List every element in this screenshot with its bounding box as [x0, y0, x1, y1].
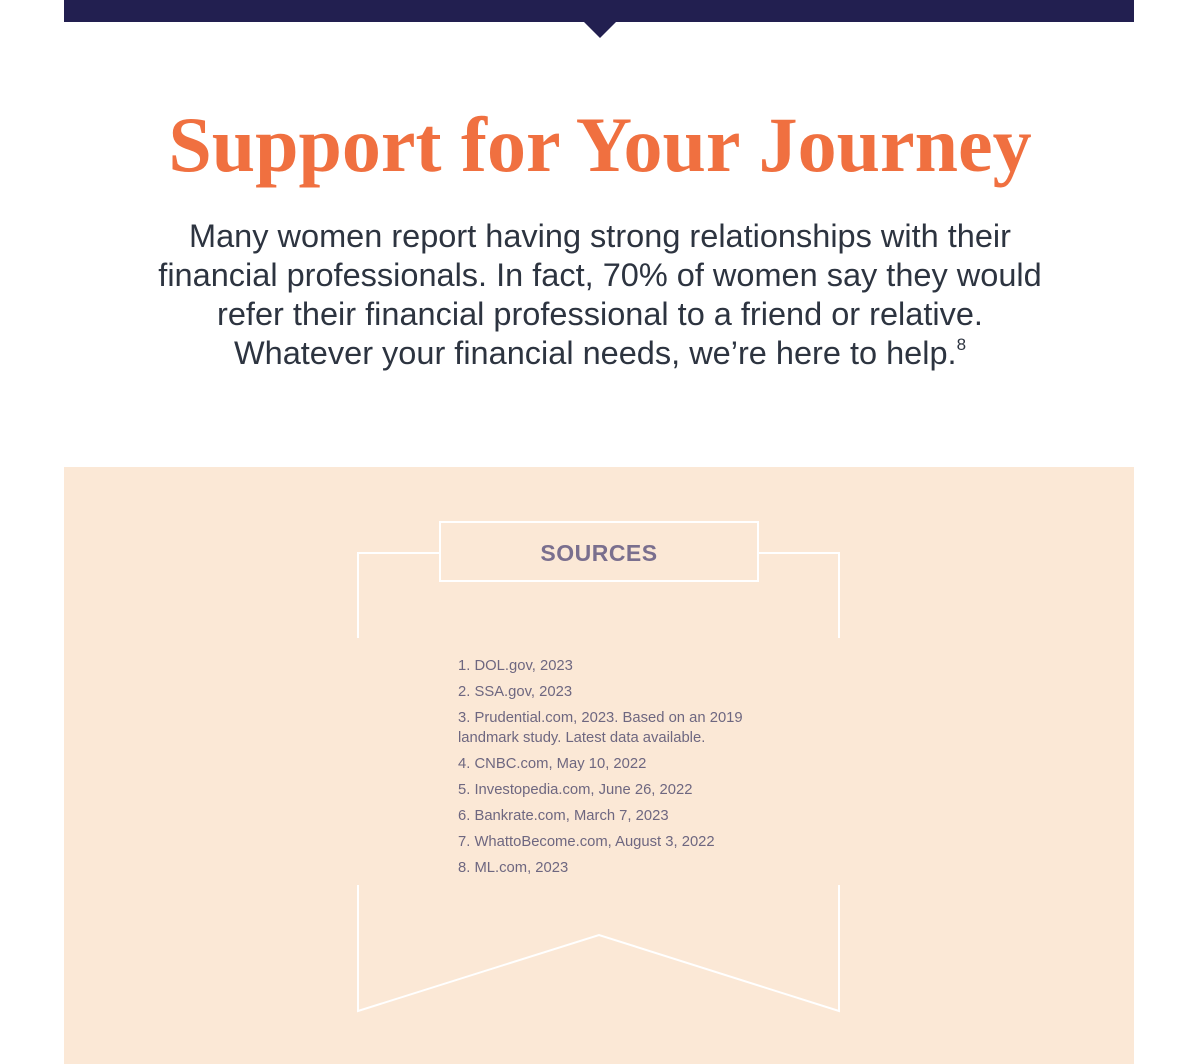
- sources list: 7. WhattoBecome.com, August 3, 2022: [458, 834, 715, 850]
- sources heading: SOURCES: [540, 540, 658, 566]
- top bar with notch: [64, 0, 1134, 38]
- sources list: 8. ML.com, 2023: [458, 860, 568, 876]
- sources list: [458, 658, 743, 876]
- intro paragraph: refer their financial professional to a friend or relative.: [217, 296, 983, 332]
- title: Support for Your Journey: [168, 101, 1032, 188]
- sources list: 1. DOL.gov, 2023: [458, 658, 573, 674]
- sources list: landmark study. Latest data available.: [458, 730, 705, 746]
- sources list: 5. Investopedia.com, June 26, 2022: [458, 782, 692, 798]
- intro paragraph: Many women report having strong relationships with their: [189, 218, 1011, 254]
- sources list: 4. CNBC.com, May 10, 2022: [458, 756, 646, 772]
- sources frame: [357, 521, 840, 1012]
- intro paragraph: [158, 218, 1042, 371]
- intro paragraph: Whatever your financial needs, we’re here to help.8: [234, 335, 966, 371]
- sources list: 6. Bankrate.com, March 7, 2023: [458, 808, 669, 824]
- sources list: 3. Prudential.com, 2023. Based on an 2019: [458, 710, 743, 726]
- sources list: 2. SSA.gov, 2023: [458, 684, 572, 700]
- intro paragraph: financial professionals. In fact, 70% of women say they would: [158, 257, 1042, 293]
- panel: sources: [64, 467, 1134, 1064]
